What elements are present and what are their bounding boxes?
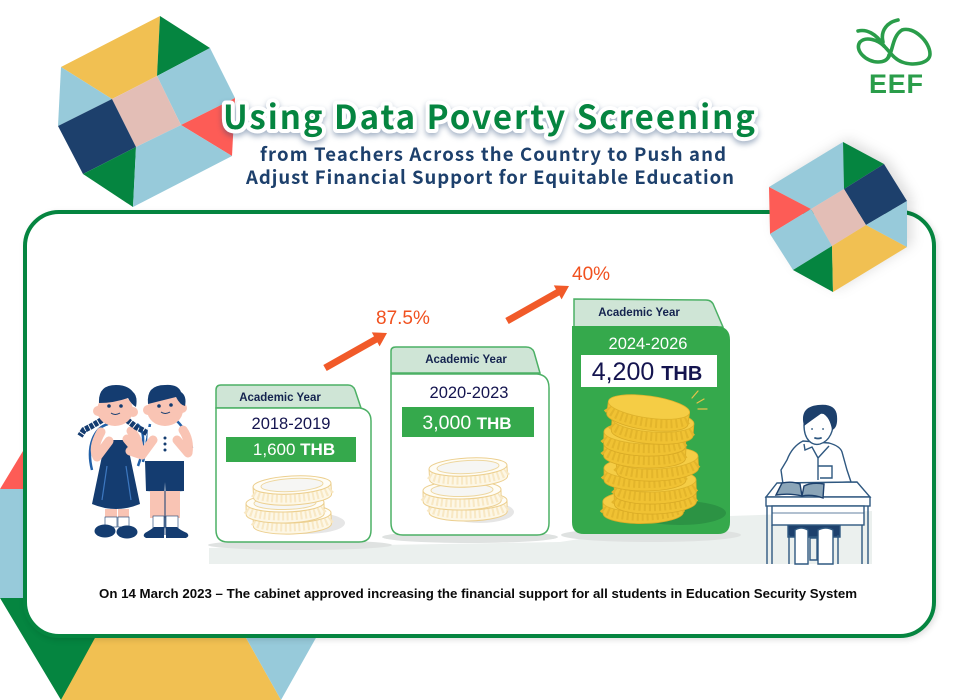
decorative polygon: top right	[769, 142, 907, 292]
chair and legs	[788, 525, 840, 564]
coin stack	[603, 390, 726, 525]
face	[812, 429, 823, 438]
arrow: 2018 to 2020	[323, 332, 387, 371]
subtitle	[245, 141, 734, 190]
card: 2020-2023	[391, 347, 549, 535]
decorative polygon: bottom left	[0, 451, 317, 700]
tab label: Academic Year	[598, 307, 680, 319]
amount: 1,600 THB	[253, 440, 335, 459]
tab label: Academic Year	[239, 392, 321, 404]
card: 2024-2026	[572, 299, 730, 534]
arrow: 2020 to 2024	[505, 285, 569, 324]
ground	[208, 511, 872, 564]
amount: 3,000 THB	[422, 412, 512, 434]
card body	[572, 326, 730, 534]
sparkle	[692, 391, 707, 409]
coin stack	[423, 456, 514, 523]
title: Using Data Poverty Screening	[223, 91, 755, 139]
main panel	[25, 212, 934, 636]
desk	[766, 482, 870, 564]
amount: 4,200 THB	[592, 358, 702, 386]
decorative polygon: top left	[58, 16, 235, 207]
girl	[80, 385, 148, 538]
coin stack	[246, 474, 345, 535]
footnote: On 14 March 2023 – The cabinet approved increasing the financial support for all students in Education Security System	[99, 586, 857, 601]
amount bar	[226, 437, 356, 462]
tab label: Academic Year	[425, 354, 507, 366]
subtitle: Adjust Financial Support for Equitable Education	[245, 164, 734, 190]
illustration: two students	[80, 385, 192, 538]
hair	[803, 405, 837, 430]
label: 87.5%: 87.5%	[376, 308, 430, 329]
illustration: student at desk	[766, 405, 870, 564]
card tab	[216, 385, 361, 408]
card tab	[391, 347, 540, 373]
card body	[216, 408, 371, 542]
book	[776, 482, 824, 498]
subtitle: from Teachers Across the Country to Push and	[260, 141, 726, 167]
head	[804, 413, 833, 444]
year: 2020-2023	[430, 384, 508, 402]
logo: EEF: EEF	[869, 69, 923, 99]
card body	[391, 374, 549, 535]
card tab	[574, 299, 723, 327]
amount bar	[402, 407, 534, 437]
shirt	[781, 441, 851, 484]
year: 2018-2019	[252, 415, 330, 433]
boy	[130, 385, 192, 538]
label: 40%: 40%	[572, 264, 610, 285]
card: 2018-2019	[216, 385, 371, 542]
logo: EEF	[858, 20, 930, 99]
year: 2024-2026	[609, 335, 687, 353]
amount bar	[581, 355, 717, 387]
